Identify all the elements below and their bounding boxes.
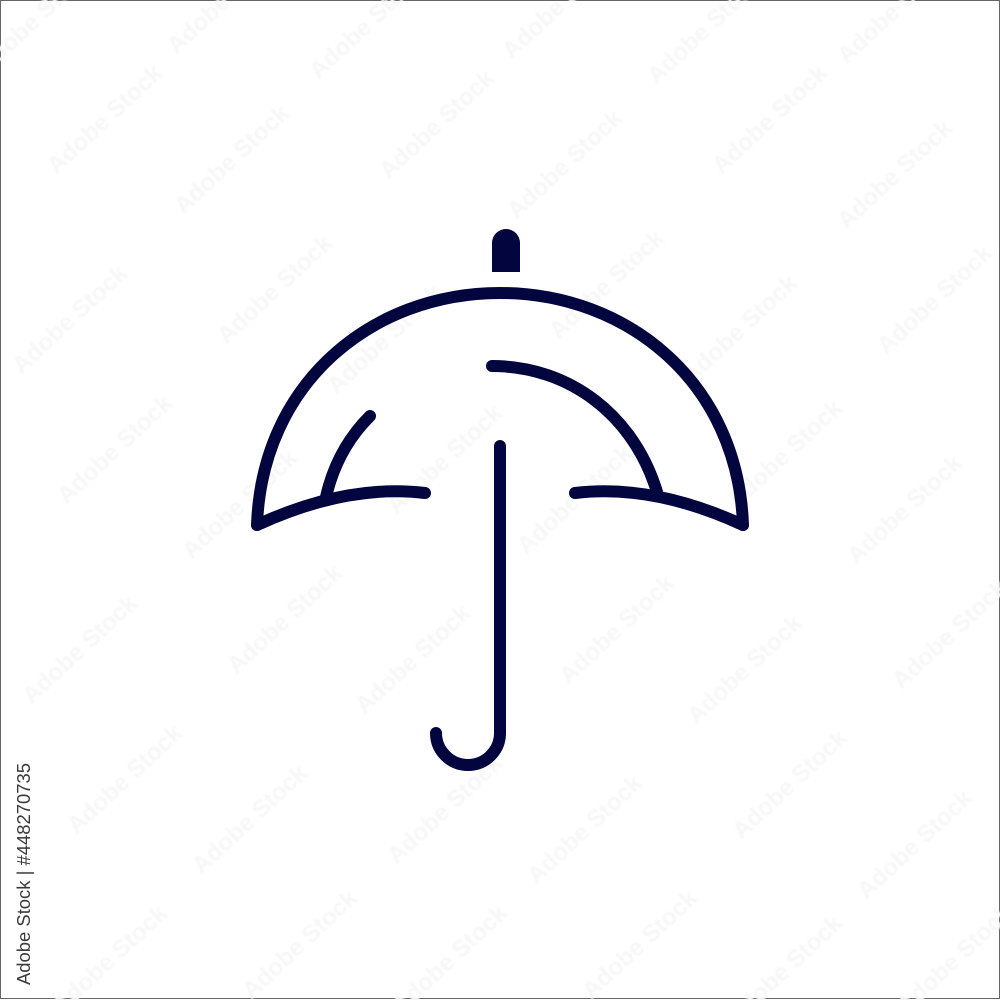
watermark pattern: Adobe Stock xyxy=(502,104,628,224)
watermark pattern: Adobe Stock xyxy=(187,759,313,879)
watermark pattern: Adobe Stock xyxy=(322,279,448,399)
umbrella canopy xyxy=(257,293,743,525)
canopy right lower edge xyxy=(575,491,743,525)
watermark pattern: Adobe Stock xyxy=(177,444,303,564)
watermark pattern: Adobe Stock xyxy=(62,719,188,839)
watermark pattern: Adobe Stock xyxy=(7,259,133,379)
watermark pattern: Adobe Stock xyxy=(852,784,978,904)
watermark pattern: Adobe Stock xyxy=(512,439,638,559)
watermark pattern: Adobe Stock xyxy=(374,64,500,184)
watermark pattern: Adobe Stock xyxy=(169,99,295,219)
watermark pattern: Adobe Stock xyxy=(17,589,143,709)
canopy left lower edge xyxy=(257,491,425,525)
watermark pattern: Adobe Stock xyxy=(522,769,648,889)
watermark pattern: Adobe Stock xyxy=(682,609,808,729)
watermark pattern: Adobe Stock xyxy=(727,724,853,844)
watermark pattern: Adobe Stock xyxy=(722,394,848,514)
watermark pattern: Adobe Stock xyxy=(842,449,968,569)
watermark pattern: Adobe Stock xyxy=(222,559,348,679)
watermark pattern: Adobe Stock xyxy=(382,399,508,519)
watermark pattern: Adobe Stock xyxy=(707,59,833,179)
watermark pattern: Adobe Stock xyxy=(212,229,338,349)
watermark pattern: Adobe Stock xyxy=(52,389,178,509)
umbrella handle xyxy=(436,446,500,765)
watermark pattern: Adobe Stock xyxy=(677,269,803,389)
watermark pattern: Adobe Stock xyxy=(554,569,680,689)
watermark pattern: Adobe Stock xyxy=(872,239,998,359)
umbrella tip xyxy=(492,229,520,272)
watermark pattern: Adobe Stock xyxy=(350,599,476,719)
icon: umbrella xyxy=(257,229,743,765)
watermark pattern: Adobe Stock xyxy=(832,114,958,234)
right inner fold xyxy=(492,366,657,492)
left inner fold xyxy=(326,416,370,497)
watermark pattern: Adobe Stock xyxy=(544,224,670,344)
watermark pattern: Adobe Stock xyxy=(382,749,508,869)
watermark pattern: Adobe Stock xyxy=(42,59,168,179)
stock id caption: Adobe Stock | #448270735 xyxy=(14,763,34,985)
